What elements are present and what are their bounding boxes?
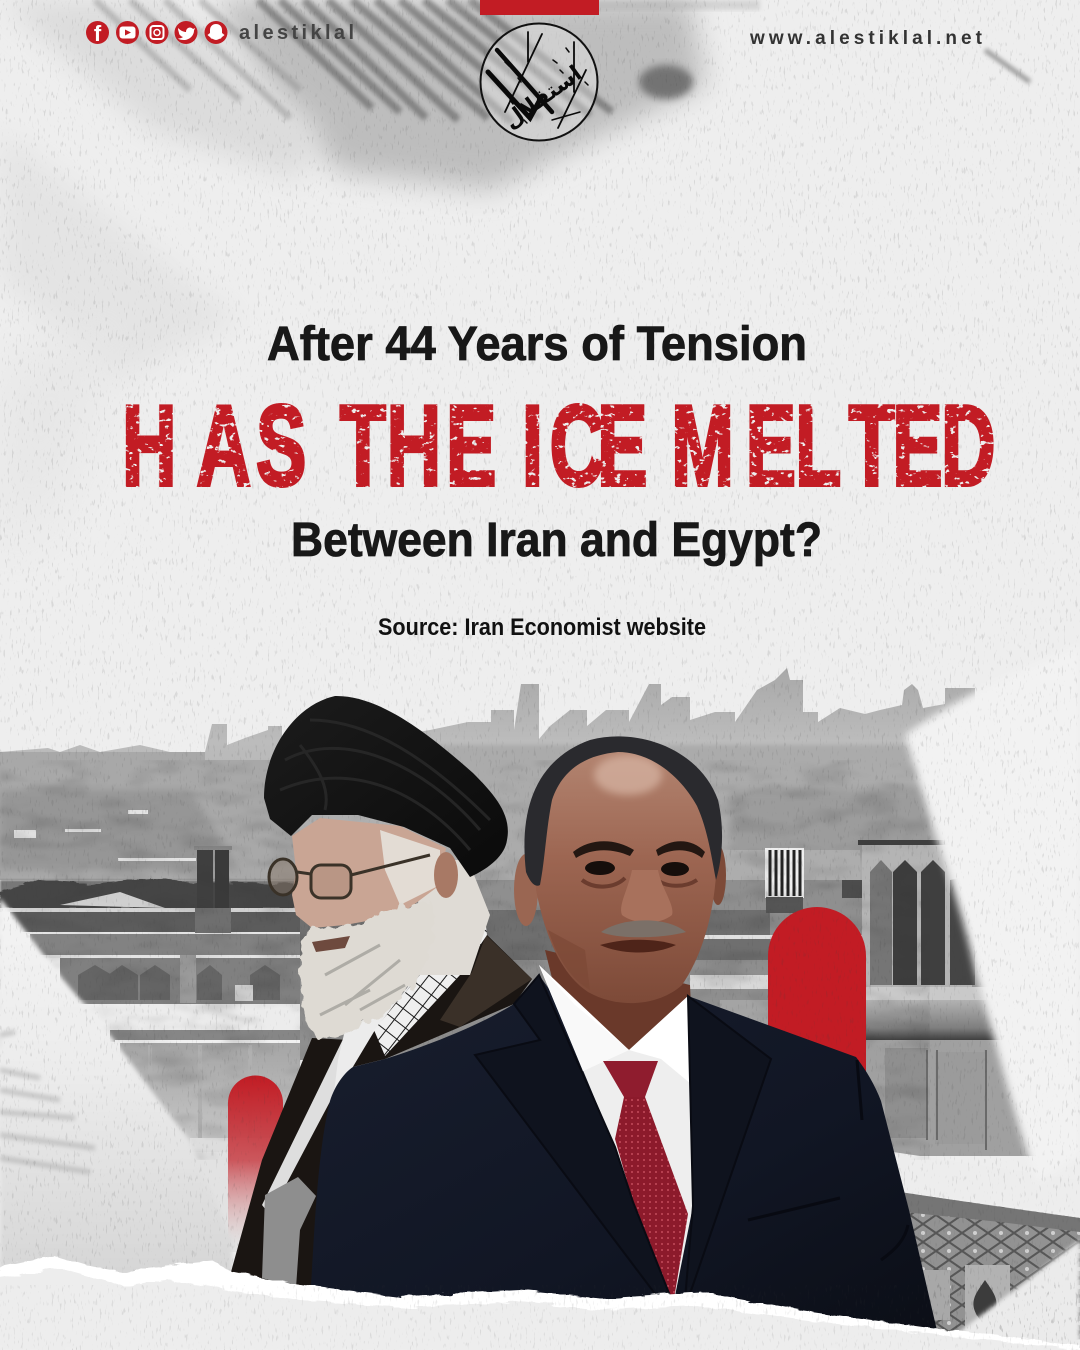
nose	[621, 870, 672, 922]
ears	[514, 854, 538, 926]
torn paper right	[905, 645, 1080, 1182]
light roof streaks	[14, 810, 196, 861]
forehead highlight	[594, 755, 662, 795]
website: www.alestiklal.net	[749, 28, 983, 49]
hair	[524, 736, 722, 886]
torn bottom paper	[0, 1255, 1080, 1350]
social icons	[86, 21, 228, 46]
right lapel	[684, 996, 771, 1311]
left lapel	[475, 975, 676, 1311]
neck	[545, 950, 692, 1060]
blurred newspaper at top	[0, 0, 1030, 560]
top red tab	[480, 0, 599, 15]
robe	[231, 932, 532, 1290]
far skyline	[0, 668, 1000, 880]
rooftop band left	[0, 880, 300, 910]
icon: facebook: f	[94, 21, 102, 46]
red pill small fading	[228, 1076, 283, 1245]
icon: twitter	[174, 21, 198, 44]
portrait: Egyptian president	[311, 736, 938, 1340]
red pill large	[768, 907, 866, 1147]
ear	[434, 852, 458, 898]
central rooftop band	[300, 880, 1000, 1060]
cityscape photograph	[0, 668, 1080, 1340]
portrait: Iranian leader	[231, 696, 532, 1290]
suit jacket	[311, 975, 938, 1340]
shirt	[539, 965, 693, 1311]
icon: instagram	[146, 21, 168, 44]
city mottling texture	[0, 760, 930, 1160]
tie	[603, 1061, 688, 1311]
logo: circular calligraphy seal: استقلال	[499, 60, 586, 133]
small wind tower	[765, 848, 862, 913]
collar	[539, 965, 691, 1084]
twin wind towers left	[194, 846, 232, 933]
eye bags	[582, 878, 697, 887]
source line: Source: Iran Economist website	[378, 614, 706, 641]
icon: snapchat	[204, 21, 228, 44]
scarf	[374, 909, 487, 1056]
torn paper lower left with blurred text	[0, 898, 232, 1275]
face	[536, 745, 717, 1003]
eyes	[585, 861, 689, 876]
torn paper lower right	[955, 1240, 1080, 1350]
moustache	[601, 920, 686, 937]
tiled frieze lower right	[898, 1192, 1080, 1340]
arched wall	[60, 958, 300, 1004]
large wind tower right	[858, 840, 975, 987]
main headline: HAS THE ICE MELTED	[122, 383, 995, 510]
pocket and seams	[748, 1060, 908, 1260]
lower pale wall	[120, 1043, 300, 1183]
cheek shadow	[548, 930, 590, 990]
brows	[573, 841, 634, 858]
icon: youtube	[116, 21, 139, 44]
carved panels right	[866, 1040, 1036, 1156]
heading line 1: After 44 Years of Tension	[267, 318, 807, 371]
face	[292, 818, 446, 928]
glasses	[269, 855, 430, 898]
icon: facebook	[86, 21, 109, 46]
social handle: alestiklal	[239, 22, 354, 44]
logo: circular calligraphy seal	[480, 24, 598, 140]
mouth	[600, 940, 676, 952]
hazy middle distance	[0, 752, 300, 880]
beard	[301, 900, 434, 1040]
hair and neck	[415, 860, 490, 975]
white terrace	[100, 1004, 300, 1030]
grey cloth	[262, 1177, 316, 1288]
turban	[264, 696, 508, 877]
heading line 3: Between Iran and Egypt?	[291, 514, 822, 567]
